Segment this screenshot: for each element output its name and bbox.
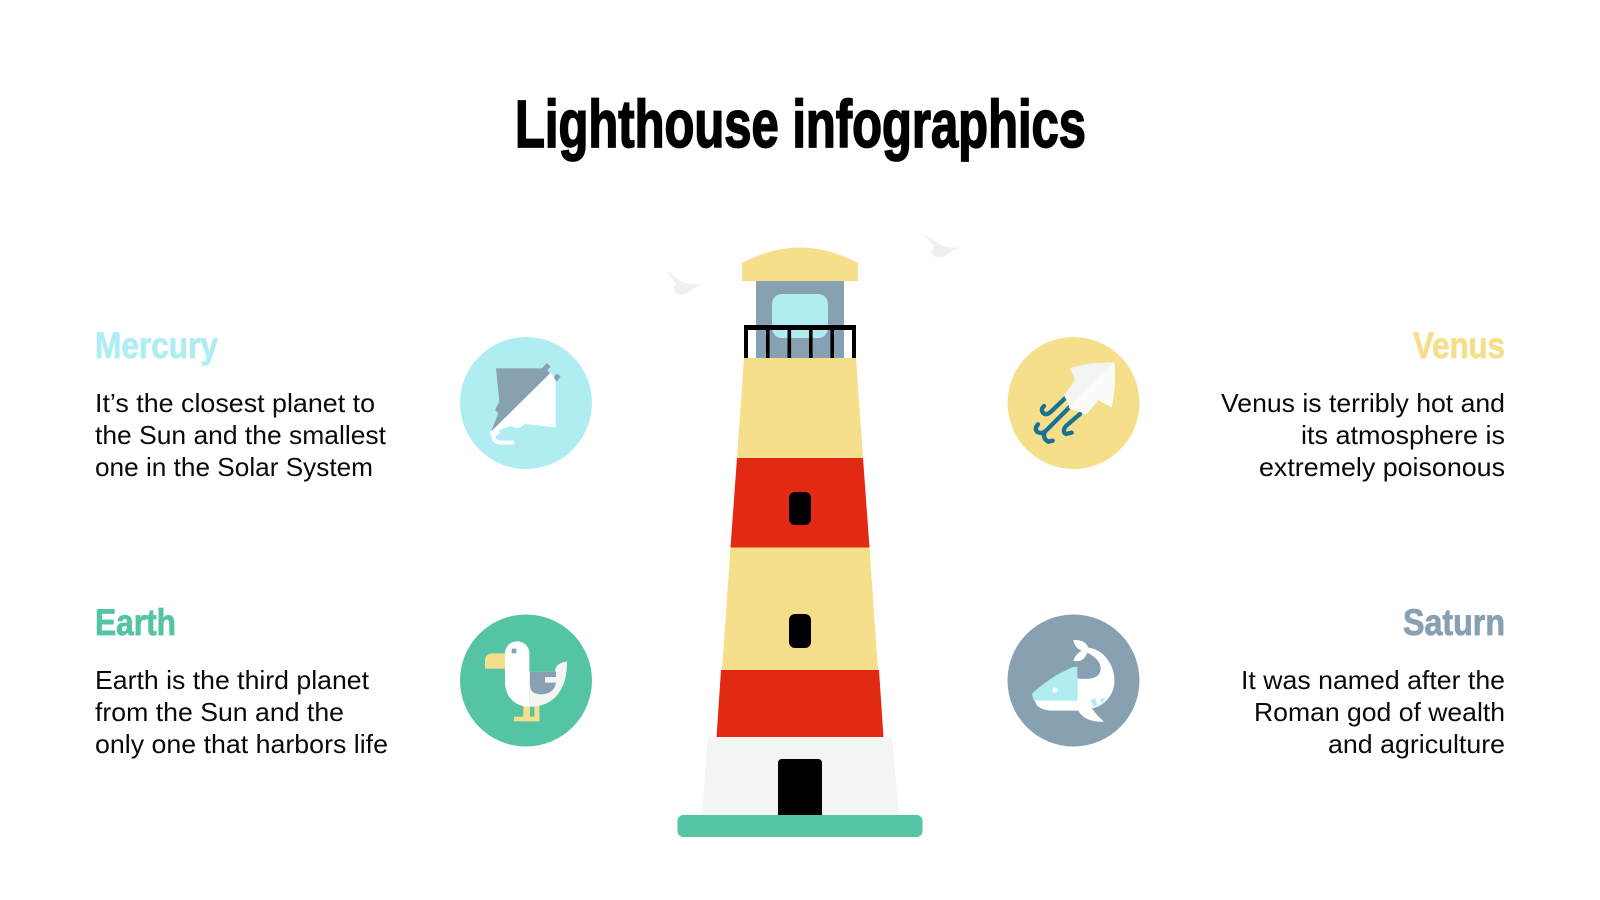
text block: Venus description xyxy=(1221,390,1505,482)
icon: seagull on green circle xyxy=(460,614,592,746)
panel: Saturn text xyxy=(1241,602,1505,759)
text block: Saturn description xyxy=(1241,667,1505,759)
tower base xyxy=(702,737,899,815)
heading: Earth: Earth xyxy=(95,602,176,643)
text block: Venus description: its atmosphere is xyxy=(1301,422,1505,450)
tower stripe: top yellow xyxy=(737,358,863,458)
icon: stingray on light blue circle xyxy=(460,337,592,469)
text block: Mercury description xyxy=(95,390,386,482)
ground xyxy=(678,815,922,837)
heading: Venus: Venus xyxy=(1413,325,1505,366)
text block: Mercury description: It’s the closest planet to xyxy=(95,390,375,418)
text block: Mercury description: one in the Solar System xyxy=(95,454,373,482)
roof xyxy=(742,248,858,281)
text block: Mercury description: the Sun and the smallest xyxy=(95,422,386,450)
door xyxy=(778,759,822,815)
tower stripe: upper red xyxy=(730,458,870,548)
lantern room xyxy=(756,281,844,359)
icon: squid on yellow circle xyxy=(1008,337,1140,469)
lower window xyxy=(789,614,811,648)
icon: left seagull silhouette xyxy=(665,270,707,295)
text block: Earth description: only one that harbors life xyxy=(95,731,388,759)
lantern window xyxy=(772,294,828,338)
text block: Venus description: Venus is terribly hot and xyxy=(1221,390,1505,418)
tower stripe: lower yellow xyxy=(722,548,878,670)
heading: Mercury: Mercury xyxy=(95,325,218,366)
panel: Earth text xyxy=(95,602,388,759)
text block: Earth description: from the Sun and the xyxy=(95,699,344,727)
text block: Earth description: Earth is the third planet xyxy=(95,667,369,695)
balcony railing xyxy=(744,325,856,358)
icon: whale on slate circle xyxy=(1008,614,1140,746)
panel: Venus text xyxy=(1221,325,1505,482)
lighthouse xyxy=(678,248,922,837)
tower stripe: lower red xyxy=(716,670,884,737)
text block: Saturn description: It was named after the xyxy=(1241,667,1505,695)
upper window xyxy=(789,492,811,525)
text block: Saturn description: Roman god of wealth xyxy=(1254,699,1505,727)
text block: Saturn description: and agriculture xyxy=(1328,731,1505,759)
panel: Mercury text xyxy=(95,325,386,482)
text block: Venus description: extremely poisonous xyxy=(1259,454,1505,482)
icon: right seagull silhouette xyxy=(923,233,965,258)
title: Lighthouse infographics xyxy=(515,87,1086,162)
text block: Earth description xyxy=(95,667,388,759)
heading: Saturn: Saturn xyxy=(1403,602,1505,643)
